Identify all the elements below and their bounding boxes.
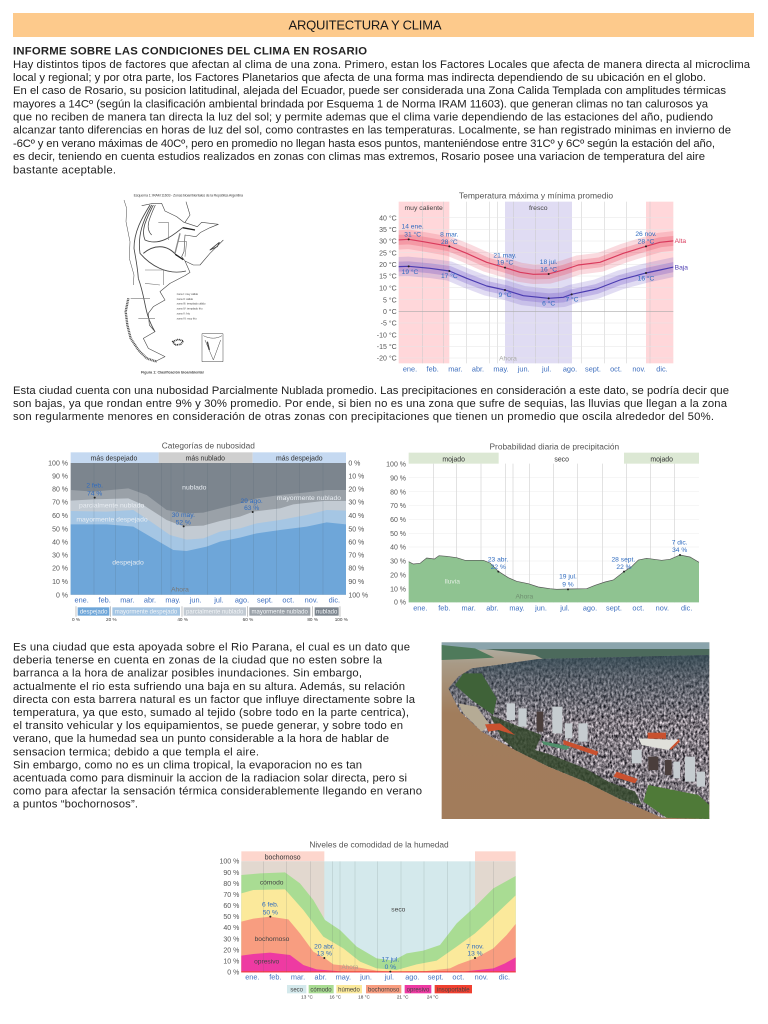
chart: temperatura máxima y mínima promedio: 28 °C	[441, 238, 458, 246]
chart: categorías de nubosidad: más nublado	[186, 456, 225, 463]
text block: informe sobre las condiciones: INFORME SOBRE LAS CONDICIONES DEL CLIMA EN ROSARIO	[13, 46, 367, 58]
map legend: zona VI: muy frío	[177, 316, 197, 320]
chart: niveles de comodidad de la humedad: seco	[391, 907, 406, 914]
legend: nubosidad: nublado	[316, 610, 338, 616]
chart: temperatura máxima y mínima promedio: abr.	[472, 364, 484, 373]
text block: río Paraná: temperatura, ya que esto, sumado al tejido (sobre todo en la parte centrica),	[13, 707, 409, 719]
chart: niveles de comodidad de la humedad	[220, 840, 516, 1000]
chart: niveles de comodidad de la humedad: Niveles de comodidad de la humedad	[309, 840, 449, 850]
legend: humedad: 18 °C	[358, 995, 370, 1000]
chart: niveles de comodidad de la humedad: 90 %	[223, 870, 239, 877]
chart: probabilidad diaria de precipitación: 80 %	[390, 489, 406, 496]
text block: río Paraná: barranca a la hora de analizar posibles inundaciones. Sin embargo,	[13, 668, 362, 680]
chart: temperatura máxima y mínima promedio: 6 °C	[542, 299, 555, 307]
chart: niveles de comodidad de la humedad: 60 %	[223, 903, 239, 910]
chart: categorías de nubosidad: Categorías de nubosidad	[162, 441, 255, 451]
chart: niveles de comodidad de la humedad: jun.	[359, 973, 372, 982]
chart: probabilidad diaria de precipitación: 34 %	[672, 547, 687, 554]
chart: niveles de comodidad de la humedad: mar.	[291, 973, 305, 982]
chart: temperatura máxima y mínima promedio: dic.	[656, 364, 668, 373]
text block: informe sobre las condiciones: alcanzar tanto diferencias en horas de luz del sol, como contrastes en las temperaturas. Localmente, se han registrado minimas en invierno de	[13, 124, 731, 136]
chart: categorías de nubosidad: jul.	[213, 595, 224, 604]
chart: categorías de nubosidad: 63 %	[244, 505, 259, 512]
chart: probabilidad diaria de precipitación: 7 dic.	[672, 539, 688, 546]
chart: categorías de nubosidad: 0 %	[56, 592, 68, 599]
tall buildings	[507, 703, 705, 787]
chart: niveles de comodidad de la humedad: 7 nov.	[466, 943, 484, 950]
chart: temperatura máxima y mínima promedio: feb.	[427, 364, 439, 373]
chart: temperatura máxima y mínima promedio: 19 °C	[497, 259, 514, 267]
text block: informe sobre las condiciones: que no reciben de manera tan directa la luz del sol; y permite ademas que el clima varie dependiendo de las estaciones del año, pudiendo	[13, 112, 713, 124]
chart: categorías de nubosidad: parcialmente nublado	[79, 503, 145, 510]
legend: nubosidad: 20 %	[106, 617, 117, 622]
text block: río Paraná: acentuada como para disminuir la accion de la radiacion solar directa, pero si	[13, 772, 407, 784]
chart: temperatura máxima y mínima promedio: mar.	[448, 364, 462, 373]
band: low temperature	[397, 266, 675, 298]
chart: categorías de nubosidad: 50 %	[52, 526, 68, 533]
text block: río Paraná: verano, que la humedad sea un punto considerable a la hora de hablar de	[13, 733, 389, 745]
chart: temperatura máxima y mínima promedio: -20 °C	[377, 355, 397, 363]
chart: categorías de nubosidad	[48, 441, 368, 622]
chart: niveles de comodidad de la humedad: 13 %	[467, 951, 483, 958]
chart: probabilidad diaria de precipitación: oct.	[632, 603, 644, 612]
chart: categorías de nubosidad: mayormente nublado	[277, 495, 341, 502]
chart: categorías de nubosidad: abr.	[144, 595, 156, 604]
chart: niveles de comodidad de la humedad: 100 %	[220, 859, 239, 866]
legend: humedad: opresivo	[407, 987, 430, 993]
chart: temperatura máxima y mínima promedio: -5 °C	[381, 320, 397, 328]
chart: probabilidad diaria de precipitación: 22 %	[616, 564, 632, 571]
chart: probabilidad diaria de precipitación: 30 %	[390, 559, 406, 566]
text block: informe sobre las condiciones: En el caso de Rosario, su posicion latitudinal, alejada del Ecuador, puede ser considerada una Zona Calida Templada con amplitudes térmicas	[13, 85, 726, 97]
chart: categorías de nubosidad: 30 may.	[172, 512, 195, 519]
map legend: zona IV: templado frío	[177, 307, 203, 311]
chart: probabilidad diaria de precipitación: 20 %	[390, 572, 406, 579]
chart: categorías de nubosidad: oct.	[282, 595, 294, 604]
chart: temperatura máxima y mínima promedio: jun.	[517, 364, 530, 373]
legend: nubosidad: 80 %	[307, 617, 318, 622]
chart: temperatura máxima y mínima promedio: 5 °C	[383, 296, 397, 304]
chart: categorías de nubosidad: sept.	[257, 595, 273, 604]
chart: categorías de nubosidad: mayormente despejado	[76, 517, 148, 524]
chart: probabilidad diaria de precipitación: 0 %	[394, 600, 406, 607]
legend: humedad: 24 °C	[427, 995, 439, 1000]
chart: temperatura máxima y mínima promedio: 10 °C	[379, 284, 397, 292]
chart: categorías de nubosidad: ago.	[235, 595, 249, 604]
chart: probabilidad diaria de precipitación: seco	[554, 457, 569, 464]
text block: nubosidad y precipitaciones: son bajas, ya que rondan entre 9% y 30% promedio. Por ende, si bien no es una zona que sufre de sequias, las lluvias que llegan a la zona	[13, 398, 728, 410]
chart: categorías de nubosidad: 0 %	[348, 461, 360, 468]
chart: temperatura máxima y mínima promedio: 16 °C	[540, 265, 557, 273]
chart: niveles de comodidad de la humedad: 80 %	[223, 881, 239, 888]
chart: niveles de comodidad de la humedad: bochornoso	[265, 854, 301, 861]
chart: niveles de comodidad de la humedad: jul.	[384, 973, 394, 982]
chart: temperatura máxima y mínima promedio: 26 nov.	[635, 231, 657, 238]
photo: vista aérea de Rosario y el río Paraná	[442, 642, 709, 819]
chart: niveles de comodidad de la humedad: ago.	[405, 973, 419, 982]
legend: humedad: seco	[290, 987, 304, 993]
legend: nubosidad: parcialmente nublado	[186, 610, 244, 616]
chart: probabilidad diaria de precipitación: 100 %	[386, 461, 406, 468]
legend: nubosidad	[72, 606, 348, 622]
chart: categorías de nubosidad: 100 %	[48, 461, 68, 468]
chart: categorías de nubosidad: 20 %	[348, 487, 364, 494]
chart: categorías de nubosidad: 70 %	[348, 553, 364, 560]
chart: niveles de comodidad de la humedad: may.	[336, 973, 351, 982]
chart: temperatura máxima y mínima promedio: Baja	[675, 264, 688, 271]
text block: informe sobre las condiciones: Hay distintos tipos de factores que afectan al clima de una zona. Primero, estan los Factores Locales que afecta de manera directa al microclima	[13, 59, 751, 71]
chart: niveles de comodidad de la humedad: 13 %	[317, 951, 332, 958]
chart: niveles de comodidad de la humedad: 30 %	[223, 936, 239, 943]
chart: probabilidad diaria de precipitación: 70 %	[390, 503, 406, 510]
chart: temperatura máxima y mínima promedio: 21 may.	[493, 252, 517, 259]
chart: niveles de comodidad de la humedad: 50 %	[263, 909, 278, 916]
inset map	[202, 334, 223, 362]
chart: categorías de nubosidad: 90 %	[52, 474, 68, 481]
chart: temperatura máxima y mínima promedio: 0 °C	[383, 308, 397, 316]
chart: probabilidad diaria de precipitación: 9 %	[562, 581, 574, 588]
chart: niveles de comodidad de la humedad: cómodo	[260, 880, 284, 887]
chart: categorías de nubosidad: 40 %	[52, 539, 68, 546]
chart: categorías de nubosidad: 74 %	[87, 490, 102, 497]
chart: temperatura máxima y mínima promedio: -15 °C	[377, 343, 397, 351]
chart: categorías de nubosidad: más despejado	[91, 456, 137, 463]
chart: niveles de comodidad de la humedad: 70 %	[223, 892, 239, 899]
chart: probabilidad diaria de precipitación: may.	[509, 603, 525, 612]
chart: niveles de comodidad de la humedad: 0 %	[385, 964, 396, 971]
chart: niveles de comodidad de la humedad: 6 feb.	[262, 901, 279, 908]
chart: temperatura máxima y mínima promedio: 17 °C	[441, 272, 458, 280]
chart: categorías de nubosidad: mar.	[120, 595, 134, 604]
map legend	[177, 292, 206, 320]
chart: niveles de comodidad de la humedad: 10 %	[223, 958, 239, 965]
chart: temperatura máxima y mínima promedio: 30 °C	[379, 238, 397, 246]
red roofs	[485, 723, 680, 783]
chart: niveles de comodidad de la humedad: abr.	[315, 973, 327, 982]
chart: probabilidad diaria de precipitación: 50 %	[390, 531, 406, 538]
map outline	[142, 203, 218, 362]
legend: nubosidad: mayormente nublado	[252, 610, 308, 616]
chart: categorías de nubosidad: 100 %	[348, 592, 368, 599]
chart: niveles de comodidad de la humedad: 50 %	[223, 914, 239, 921]
chart: temperatura máxima y mínima promedio: -10 °C	[377, 331, 397, 339]
text block: río Paraná: como para afectar la sensación térmica considerablemente llegando en verano	[13, 786, 422, 798]
chart: temperatura máxima y mínima promedio: fresco	[529, 205, 548, 212]
legend: humedad: 16 °C	[329, 995, 342, 1000]
chart: probabilidad diaria de precipitación: jun.	[534, 603, 547, 612]
chart: probabilidad diaria de precipitación: abr.	[486, 603, 498, 612]
map: clasificación bioambiental de Argentina	[124, 193, 244, 375]
chart: temperatura máxima y mínima promedio: Alta	[675, 238, 686, 245]
map: clasificación bioambiental de Argentina: Esquema 1: IRAM 11603 - Zonas bioambientales de la República Argentina	[134, 193, 244, 197]
chart: niveles de comodidad de la humedad: oct.	[452, 973, 464, 982]
legend: nubosidad: 60 %	[243, 617, 253, 622]
riverside park	[455, 673, 497, 715]
map legend: zona III: templado cálido	[177, 302, 206, 306]
chart: probabilidad diaria de precipitación: dic.	[681, 603, 692, 612]
map legend: zona II: cálido	[177, 297, 194, 301]
chart: probabilidad diaria de precipitación: 23 abr.	[488, 557, 508, 564]
chart: categorías de nubosidad: 80 %	[52, 487, 68, 494]
chart: categorías de nubosidad: 30 %	[348, 500, 364, 507]
chart: temperatura máxima y mínima promedio: Temperatura máxima y mínima promedio	[459, 190, 613, 200]
chart: categorías de nubosidad: más despejado	[276, 456, 323, 463]
title bar	[13, 13, 754, 37]
legend: humedad: 21 °C	[397, 995, 409, 1000]
chart: niveles de comodidad de la humedad: 40 %	[223, 925, 239, 932]
text block: informe sobre las condiciones: local y regional; y por otra parte, los Factores Planetarios que afecta de una forma mas indirecta dependiendo de su ubicación en el globo.	[13, 72, 706, 84]
chart: temperatura máxima y mínima promedio: muy caliente	[404, 205, 443, 212]
chart: categorías de nubosidad: 70 %	[52, 500, 68, 507]
chart: probabilidad diaria de precipitación: nov.	[656, 603, 669, 612]
text block: informe sobre las condiciones: mayores a 14Cº (según la clasificación ambiental brindada por Esquema 1 de Norma IRAM 11603). que generan climas no tan calurosos ya	[13, 98, 709, 110]
chart: probabilidad diaria de precipitación: Ahora	[515, 594, 534, 601]
legend: nubosidad: 100 %	[335, 617, 348, 622]
chart: categorías de nubosidad: 90 %	[348, 579, 364, 586]
text block: río Paraná: actualmente el rio esta sufriendo una baja en su altura. Además, su relación	[13, 681, 405, 693]
title bar: ARQUITECTURA Y CLIMA	[288, 18, 442, 32]
text block: informe sobre las condiciones: bastante aceptable.	[13, 164, 116, 176]
chart: niveles de comodidad de la humedad: bochornoso	[255, 936, 290, 943]
chart: temperatura máxima y mínima promedio: jul.	[541, 364, 551, 373]
bioclimatic zone lines	[134, 205, 150, 278]
chart: temperatura máxima y mínima promedio: 28 °C	[638, 238, 655, 246]
chart: probabilidad diaria de precipitación: 90 %	[390, 475, 406, 482]
chart: temperatura máxima y mínima promedio	[377, 190, 688, 373]
chart: temperatura máxima y mínima promedio: 31 °C	[404, 230, 421, 238]
chart: categorías de nubosidad: ene.	[75, 595, 89, 604]
chart: temperatura máxima y mínima promedio: 15 °C	[379, 273, 397, 281]
chart: categorías de nubosidad: 50 %	[348, 526, 364, 533]
chart: categorías de nubosidad: 10 %	[52, 579, 68, 586]
legend: nubosidad: despejado	[80, 610, 108, 616]
text block: nubosidad y precipitaciones: son regularmente menores en consideración de otras zonas con precipitaciones que tienen un promedio que oscila alrededor del 50%.	[13, 411, 714, 423]
chart: niveles de comodidad de la humedad: opresivo	[254, 959, 280, 966]
chart: temperatura máxima y mínima promedio: may.	[493, 364, 509, 373]
chart: categorías de nubosidad: 40 %	[348, 513, 364, 520]
band: high temperature	[397, 239, 675, 274]
chart: temperatura máxima y mínima promedio: Ahora	[499, 355, 517, 362]
chart: probabilidad diaria de precipitación: 22 %	[491, 564, 506, 571]
chart: categorías de nubosidad: feb.	[99, 595, 111, 604]
chart: categorías de nubosidad: 60 %	[348, 539, 364, 546]
chart: niveles de comodidad de la humedad: feb.	[269, 973, 281, 982]
chart: categorías de nubosidad: 30 %	[52, 553, 68, 560]
chart: niveles de comodidad de la humedad: 0 %	[227, 970, 239, 977]
chart: probabilidad diaria de precipitación: 60 %	[390, 517, 406, 524]
chart: niveles de comodidad de la humedad: sept.	[428, 973, 444, 982]
chart: niveles de comodidad de la humedad: 20 abr.	[314, 943, 335, 950]
chart: niveles de comodidad de la humedad: ene.	[245, 973, 259, 982]
chart: probabilidad diaria de precipitación: 40 %	[390, 545, 406, 552]
chart: niveles de comodidad de la humedad: 20 %	[223, 947, 239, 954]
chart: categorías de nubosidad: Ahora	[171, 587, 189, 594]
text block: nubosidad y precipitaciones: Esta ciudad cuenta con una nubosidad Parcialmente Nublada promedio. Las precipitaciones en consideración a este dato, se podría decir que	[13, 385, 729, 397]
text block: informe sobre las condiciones: es decir, teniendo en cuenta estudios realizados en zonas con climas mas extremos, Rosario posee una variacion de temperatura del aire	[13, 151, 705, 163]
chart: probabilidad diaria de precipitación: Probabilidad diaria de precipitación	[490, 441, 620, 451]
chart: probabilidad diaria de precipitación: 19 jul.	[559, 574, 577, 581]
chart: niveles de comodidad de la humedad: dic.	[499, 973, 510, 982]
chart: probabilidad diaria de precipitación	[386, 441, 699, 612]
chart: probabilidad diaria de precipitación: jul.	[559, 603, 570, 612]
legend: humedad: insoportable	[437, 987, 470, 993]
map legend: zona I: muy cálido	[177, 292, 199, 296]
chart: temperatura máxima y mínima promedio: 35 °C	[379, 226, 397, 234]
chart: categorías de nubosidad: jun.	[189, 595, 202, 604]
text block: río Paraná: Sin embargo, como no es un clima tropical, la evaporacion no es tan	[13, 759, 362, 771]
chart: probabilidad diaria de precipitación: sept.	[606, 603, 622, 612]
text block: río Paraná: sensacion termica; debido a que templa el aire.	[13, 746, 259, 758]
chart: probabilidad diaria de precipitación: feb.	[438, 603, 450, 612]
legend: nubosidad: 0 %	[72, 617, 80, 622]
chart: categorías de nubosidad: 10 %	[348, 474, 364, 481]
text block: río Paraná: directa con esta barrera natural es un factor que influye directamente sobre la	[13, 694, 416, 706]
chart: categorías de nubosidad: despejado	[112, 559, 144, 566]
legend: nubosidad: mayormente despejado	[115, 610, 178, 616]
chart: categorías de nubosidad: 60 %	[52, 513, 68, 520]
chart: categorías de nubosidad: 29 ago.	[241, 498, 263, 505]
text block: río Paraná: deberia tenerse en cuenta en zonas de la ciudad que no esten sobre la	[13, 655, 383, 667]
chart: categorías de nubosidad: 80 %	[348, 566, 364, 573]
chart: probabilidad diaria de precipitación: ene.	[413, 603, 427, 612]
chart: niveles de comodidad de la humedad: 17 jul.	[381, 957, 399, 964]
text block: nubosidad y precipitaciones	[13, 385, 729, 423]
chart: categorías de nubosidad: 20 %	[52, 566, 68, 573]
chart: temperatura máxima y mínima promedio: 8 mar.	[440, 232, 459, 239]
chart: temperatura máxima y mínima promedio: ago.	[563, 364, 577, 373]
legend: humedad: bochornoso	[368, 987, 400, 993]
chart: temperatura máxima y mínima promedio: oct.	[610, 364, 622, 373]
chart: temperatura máxima y mínima promedio: 18 jul.	[540, 259, 558, 266]
text block: río Paraná: a puntos “bochornosos”.	[13, 799, 138, 811]
chart: categorías de nubosidad: may.	[165, 595, 181, 604]
legend: humedad	[287, 985, 472, 1000]
chart: probabilidad diaria de precipitación: mar.	[462, 603, 476, 612]
text block: río Paraná: Es una ciudad que esta apoyada sobre el Rio Parana, el cual es un dato que	[13, 642, 410, 654]
map: clasificación bioambiental de Argentina: Figura 1: Clasificación bioambiental	[141, 371, 204, 375]
chart: temperatura máxima y mínima promedio: ene.	[403, 364, 417, 373]
chart: niveles de comodidad de la humedad: Ahora	[342, 964, 359, 971]
legend: humedad: 13 °C	[301, 995, 313, 1000]
chart: temperatura máxima y mínima promedio: 40 °C	[379, 214, 397, 222]
chart: temperatura máxima y mínima promedio: 20 °C	[379, 261, 397, 269]
chart: temperatura máxima y mínima promedio: 25 °C	[379, 249, 397, 257]
chart: categorías de nubosidad: 52 %	[176, 519, 191, 526]
legend: humedad: húmedo	[338, 987, 360, 993]
chart: temperatura máxima y mínima promedio: 14 ene.	[402, 224, 424, 231]
chart: categorías de nubosidad: 2 feb.	[86, 483, 103, 490]
chart: probabilidad diaria de precipitación: 28 sept.	[611, 557, 635, 564]
chart: probabilidad diaria de precipitación: lluvia	[445, 578, 460, 585]
chart: categorías de nubosidad: dic.	[329, 595, 340, 604]
legend: nubosidad: 40 %	[177, 617, 188, 622]
chart: temperatura máxima y mínima promedio: sept.	[585, 364, 601, 373]
chart: probabilidad diaria de precipitación: mojado	[442, 457, 465, 464]
chart: temperatura máxima y mínima promedio: 9 °C	[498, 291, 512, 299]
chart: niveles de comodidad de la humedad: nov.	[475, 973, 488, 982]
text block: río Paraná	[13, 642, 422, 811]
map legend: zona V: frío	[177, 311, 191, 315]
chart: temperatura máxima y mínima promedio: 16 °C	[638, 275, 655, 283]
chart: temperatura máxima y mínima promedio: 7 °C	[565, 295, 579, 303]
chart: probabilidad diaria de precipitación: ago.	[583, 603, 597, 612]
text block: informe sobre las condiciones	[13, 46, 751, 176]
chart: categorías de nubosidad: nublado	[182, 485, 207, 492]
chart: temperatura máxima y mínima promedio: 19 °C	[402, 268, 419, 276]
chart: probabilidad diaria de precipitación: mojado	[650, 457, 673, 464]
patagonian coast	[126, 298, 157, 362]
text block: informe sobre las condiciones: -6Cº y en verano máximas de 40Cº, pero en promedio no llegan hasta esos puntos, manteniéndose entre 31Cº y 6Cº según la estación del año,	[13, 138, 715, 150]
text block: río Paraná: el transito vehicular y los equipamientos, se puede generar, y sobre todo en	[13, 720, 403, 732]
chart: categorías de nubosidad: nov.	[305, 595, 318, 604]
chart: temperatura máxima y mínima promedio: nov.	[632, 364, 646, 373]
chart: probabilidad diaria de precipitación: 10 %	[390, 586, 406, 593]
legend: humedad: cómodo	[310, 987, 332, 993]
